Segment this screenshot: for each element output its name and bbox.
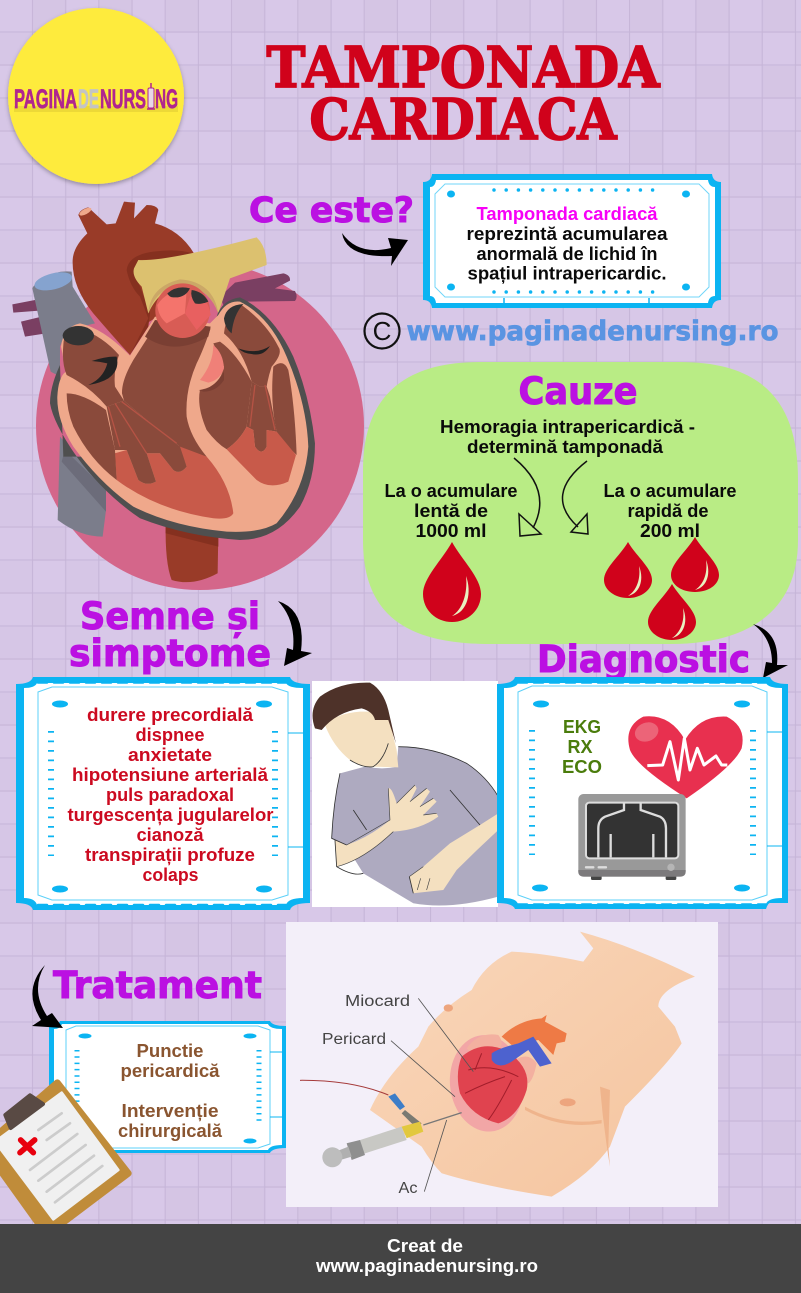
footer: Creat de <box>387 1236 463 1256</box>
arrow: to definition <box>342 233 408 266</box>
panel: causes: 1000 ml <box>416 520 486 541</box>
panel: treatment: Intervenție <box>122 1100 218 1121</box>
illustration: man with chest pain <box>312 681 498 907</box>
logo badge: PAGINA <box>14 84 77 114</box>
panel: symptoms: durere precordială <box>87 704 254 725</box>
panel: symptoms: turgescența jugularelor <box>68 804 274 825</box>
panel: causes: La o acumulare <box>604 480 736 501</box>
panel: definition <box>423 174 721 308</box>
panel: causes: determină tamponadă <box>467 436 664 457</box>
panel: symptoms: hipotensiune arterială <box>72 764 269 785</box>
panel: causes: lentă de <box>414 500 488 521</box>
arrow: to diagnostic <box>753 624 788 678</box>
illustration: pericardiocentesis: Miocard <box>345 993 410 1010</box>
heading: Diagnostic: Diagnostic <box>537 638 750 681</box>
arrow: to treatment <box>32 965 63 1028</box>
illustration: pericardiocentesis <box>286 922 718 1207</box>
heading: Semne si simptome <box>69 595 271 675</box>
logo badge: NURS <box>100 84 146 114</box>
arrow: to symptoms <box>278 601 312 666</box>
panel: treatment: Punctie <box>136 1040 204 1061</box>
panel: symptoms: dispnee <box>136 724 204 745</box>
panel: symptoms: anxietate <box>128 744 212 765</box>
logo badge: DE <box>78 84 99 114</box>
title <box>266 35 661 153</box>
illustration: heart anatomy <box>12 202 364 590</box>
panel: symptoms: colaps <box>142 864 198 885</box>
heading: Ce este?: Ce este? <box>249 191 414 231</box>
panel: treatment: chirurgicală <box>118 1120 223 1141</box>
icon: X-ray monitor <box>578 794 686 880</box>
panel: symptoms <box>16 677 310 910</box>
panel: symptoms: transpirații profuze <box>85 844 255 865</box>
logo badge: NG <box>155 84 178 114</box>
panel: diagnostic <box>497 677 788 909</box>
panel: causes: 200 ml <box>640 520 700 541</box>
panel: definition: reprezintă acumularea <box>466 223 668 244</box>
panel: diagnostic: RX <box>568 736 593 757</box>
heading: Tratament: Tratament <box>53 964 262 1007</box>
panel: causes <box>363 362 798 644</box>
panel: diagnostic: ECO <box>562 756 602 777</box>
panel: causes: Cauze <box>518 370 638 413</box>
panel: symptoms: cianoză <box>136 824 204 845</box>
icon: clipboard <box>0 1083 128 1235</box>
panel: treatment: pericardică <box>120 1060 220 1081</box>
website watermark: www.paginadenursing.ro <box>406 316 778 347</box>
icon: heart with pulse line <box>628 716 743 798</box>
panel: definition: Tamponada cardiacă <box>476 203 658 224</box>
panel: symptoms: puls paradoxal <box>106 784 234 805</box>
title: TAMPONADA <box>266 35 661 101</box>
website watermark: C <box>373 316 391 346</box>
title: CARDIACA <box>310 87 618 153</box>
panel: causes: La o acumulare <box>384 480 518 501</box>
panel: diagnostic: EKG <box>563 716 601 737</box>
panel: definition: spațiul intrapericardic. <box>468 262 666 284</box>
heading: Semne si simptome: simptome <box>69 632 271 675</box>
footer <box>0 1224 801 1293</box>
panel: definition: anormală de lichid în <box>476 243 658 264</box>
footer: www.paginadenursing.ro <box>315 1256 538 1276</box>
panel: causes: rapidă de <box>628 500 708 521</box>
illustration: pericardiocentesis: Ac <box>398 1180 418 1197</box>
panel: causes: Hemoragia intrapericardică - <box>440 416 695 437</box>
heading: Semne si simptome: Semne și <box>80 595 260 638</box>
panel: treatment <box>49 1021 286 1153</box>
logo badge <box>8 8 184 184</box>
illustration: pericardiocentesis: Pericard <box>322 1031 386 1048</box>
